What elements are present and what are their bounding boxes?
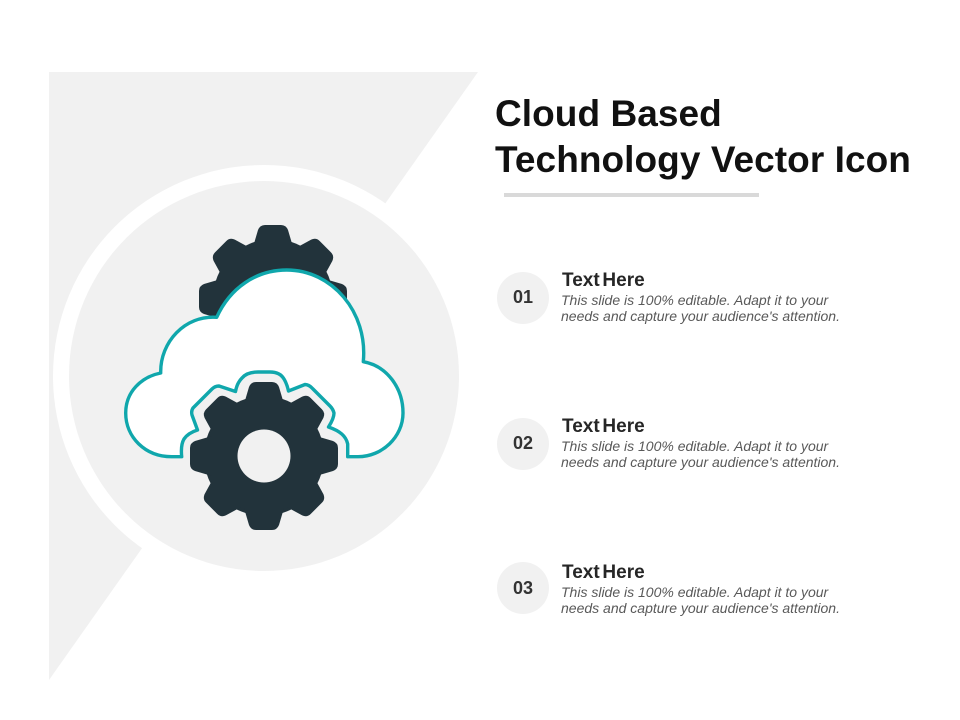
white ring	[53, 165, 475, 587]
title	[495, 93, 911, 180]
icon: upper gear	[199, 225, 347, 373]
item text 03: needs and capture your audience's attention.	[561, 600, 840, 616]
item heading 02: Text Here	[562, 416, 645, 437]
grey circle	[69, 181, 459, 571]
backdrop triangle	[49, 72, 478, 680]
item 03	[497, 562, 840, 616]
item text 02: needs and capture your audience's attention.	[561, 454, 840, 470]
item heading 01: Text Here	[562, 270, 645, 291]
icon: cloud outline	[126, 270, 403, 457]
title: Cloud Based	[495, 93, 722, 134]
number badge 01	[497, 272, 549, 324]
item text 01: This slide is 100% editable. Adapt it to your	[561, 292, 828, 308]
item text 03: This slide is 100% editable. Adapt it to your	[561, 584, 828, 600]
number badge 03: 03	[513, 578, 533, 598]
item text 02	[561, 438, 840, 470]
item text 02: This slide is 100% editable. Adapt it to your	[561, 438, 828, 454]
title underline	[504, 193, 759, 197]
item text 01	[561, 292, 840, 324]
number badge 03	[497, 562, 549, 614]
item 01	[497, 270, 840, 324]
title: Technology Vector Icon	[495, 139, 911, 180]
icon: lower gear	[190, 382, 338, 530]
number badge 02: 02	[513, 433, 533, 453]
item heading 03: Text Here	[562, 562, 645, 583]
number badge 01: 01	[513, 287, 533, 307]
item text 01: needs and capture your audience's attention.	[561, 308, 840, 324]
item 02	[497, 416, 840, 470]
number badge 02	[497, 418, 549, 470]
item text 03	[561, 584, 840, 616]
